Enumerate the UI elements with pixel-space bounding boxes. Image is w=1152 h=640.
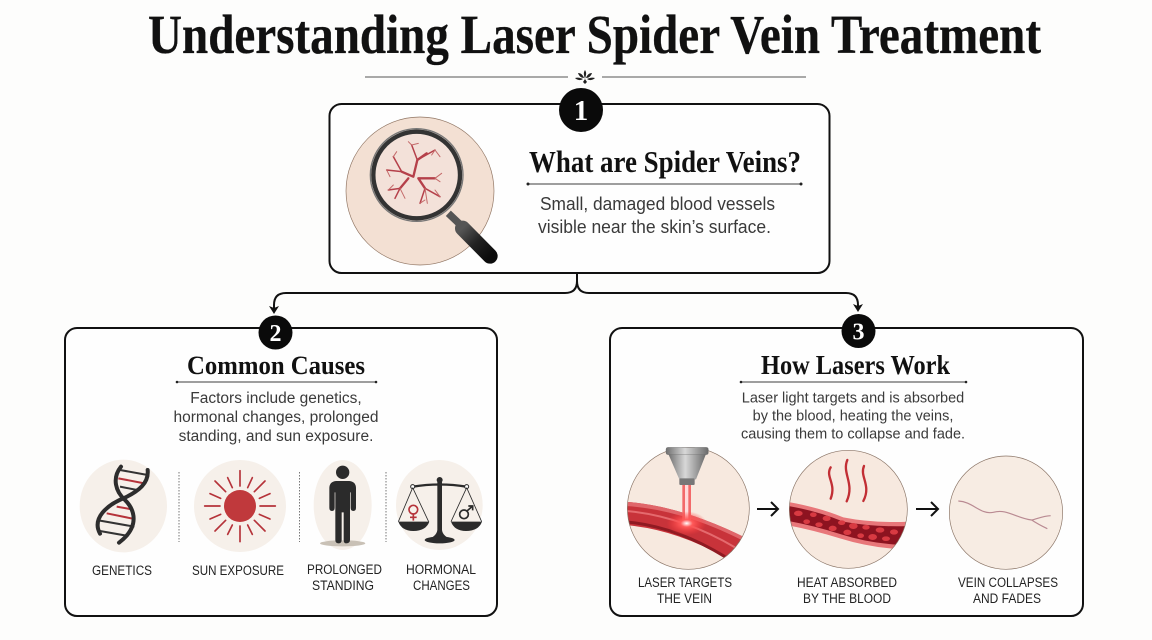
badge 1 — [559, 88, 603, 132]
causes description — [173, 390, 379, 445]
step labels: VEIN COLLAPSES — [958, 575, 1058, 590]
step labels: HEAT ABSORBED — [797, 575, 897, 590]
panel: how lasers work — [610, 328, 1083, 616]
heading underline — [176, 381, 377, 383]
lasers description: causing them to collapse and fade. — [741, 426, 965, 442]
connector arrows — [269, 274, 863, 314]
description: Small, damaged blood vessels — [540, 194, 775, 214]
panel: what are spider veins — [330, 104, 830, 273]
title divider ornament — [365, 70, 806, 84]
illustration: laser targets vein — [623, 447, 749, 569]
step labels: THE VEIN — [657, 591, 712, 606]
lasers description — [741, 390, 965, 442]
cause labels: PROLONGED — [307, 562, 382, 577]
heading underline — [740, 381, 967, 383]
step labels — [638, 575, 1058, 606]
dotted dividers — [179, 472, 386, 542]
step labels: AND FADES — [973, 591, 1041, 606]
description: visible near the skin’s surface. — [538, 217, 771, 237]
cause labels: CHANGES — [413, 578, 470, 593]
cause labels — [92, 562, 476, 593]
icon: sun — [194, 460, 286, 552]
cause labels: HORMONAL — [406, 562, 476, 577]
icon: standing person — [314, 460, 372, 550]
cause labels: GENETICS — [92, 563, 152, 578]
illustration: heat absorbed — [787, 450, 910, 568]
icon: dna — [80, 460, 167, 552]
causes description: hormonal changes, prolonged — [173, 409, 379, 426]
heading: common causes: Common Causes — [187, 351, 365, 380]
panel: common causes — [65, 328, 497, 616]
step labels: LASER TARGETS — [638, 575, 732, 590]
illustration: vein fades — [949, 456, 1063, 569]
heading: what are spider veins: What are Spider Veins? — [529, 144, 801, 179]
causes description: standing, and sun exposure. — [179, 428, 373, 445]
heading: how lasers work: How Lasers Work — [761, 350, 950, 380]
step labels: BY THE BLOOD — [803, 591, 891, 606]
badge 2 — [258, 316, 292, 350]
lasers description: by the blood, heating the veins, — [753, 408, 953, 424]
badge 3: 3 — [852, 320, 864, 346]
badge 1: 1 — [574, 95, 588, 127]
heading underline — [526, 182, 802, 186]
cause labels: STANDING — [312, 578, 374, 593]
arrow — [916, 502, 938, 516]
icon: hormone scales — [396, 460, 483, 550]
causes description: Factors include genetics, — [190, 390, 362, 407]
badge 2: 2 — [270, 321, 282, 347]
badge 3 — [842, 314, 876, 348]
description — [538, 194, 775, 237]
cause labels: SUN EXPOSURE — [192, 563, 284, 578]
lasers description: Laser light targets and is absorbed — [742, 390, 964, 406]
skin circle and magnifier illustration — [346, 117, 494, 265]
arrow — [757, 502, 778, 516]
